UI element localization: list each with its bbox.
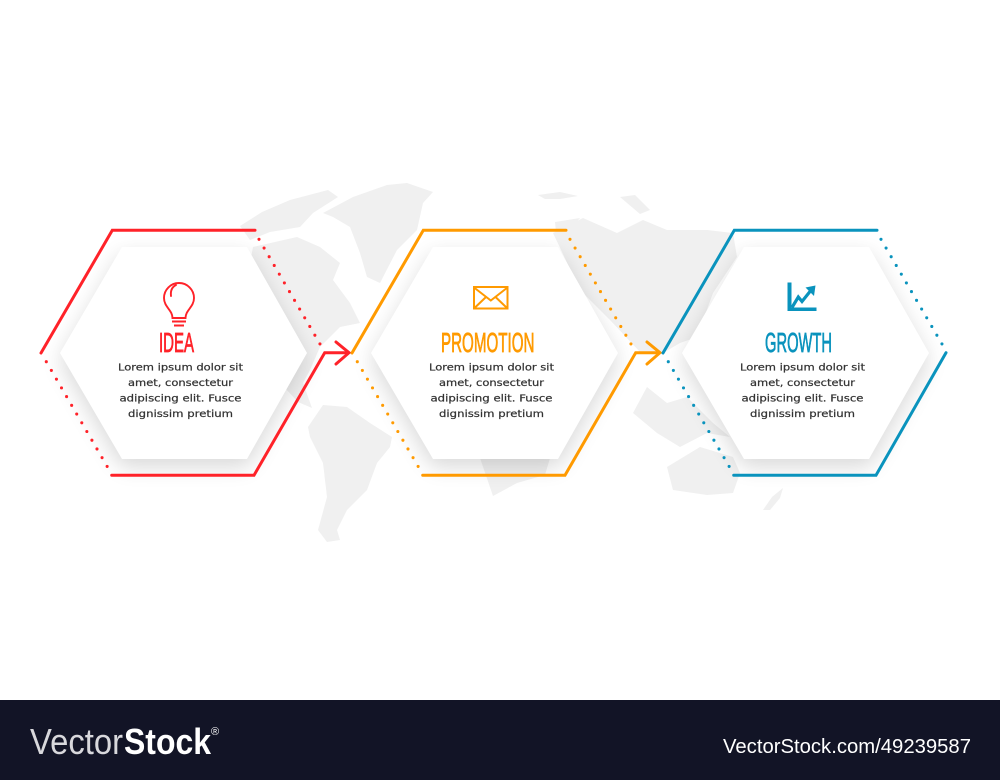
body text: growth <box>740 362 865 420</box>
footer logo: Vector <box>30 721 123 762</box>
footer bar <box>0 700 1000 780</box>
footer logo: Stock <box>124 721 212 762</box>
footer logo: ® <box>211 726 219 738</box>
hexagon panel shadows <box>60 255 929 467</box>
body text: idea: dignissim pretium <box>128 409 233 420</box>
body text: growth: adipiscing elit. Fusce <box>742 394 864 405</box>
panel: idea <box>41 230 349 475</box>
heading: idea: IDEA <box>159 327 194 358</box>
white hexagon idea <box>60 247 307 459</box>
outline growth <box>663 230 946 475</box>
white hexagon growth <box>682 247 929 459</box>
body text: idea: Lorem ipsum dolor sit <box>118 362 243 374</box>
world map background <box>240 183 783 542</box>
panel: growth <box>663 230 946 475</box>
body text: promotion: amet, consectetur <box>439 378 544 389</box>
heading: promotion: PROMOTION <box>441 327 534 358</box>
body text: growth: amet, consectetur <box>750 378 855 389</box>
white hexagon promotion <box>371 247 618 459</box>
outline idea <box>41 230 349 475</box>
icon: light bulb <box>164 283 194 326</box>
body text: promotion: dignissim pretium <box>439 409 544 420</box>
icon: envelope <box>474 287 508 308</box>
panel: promotion <box>352 230 660 475</box>
body text: idea <box>118 362 243 420</box>
body text: promotion: adipiscing elit. Fusce <box>430 394 553 405</box>
body text: promotion <box>429 362 554 420</box>
body text: growth: dignissim pretium <box>750 409 855 420</box>
body text: idea: amet, consectetur <box>128 378 233 389</box>
heading: growth: GROWTH <box>765 327 832 358</box>
body text: growth: Lorem ipsum dolor sit <box>740 362 865 374</box>
icon: growth chart <box>788 282 816 311</box>
body text: idea: adipiscing elit. Fusce <box>120 394 242 405</box>
footer image id: VectorStock.com/49239587 <box>723 736 971 758</box>
outline promotion <box>352 230 660 475</box>
body text: promotion: Lorem ipsum dolor sit <box>429 362 554 374</box>
